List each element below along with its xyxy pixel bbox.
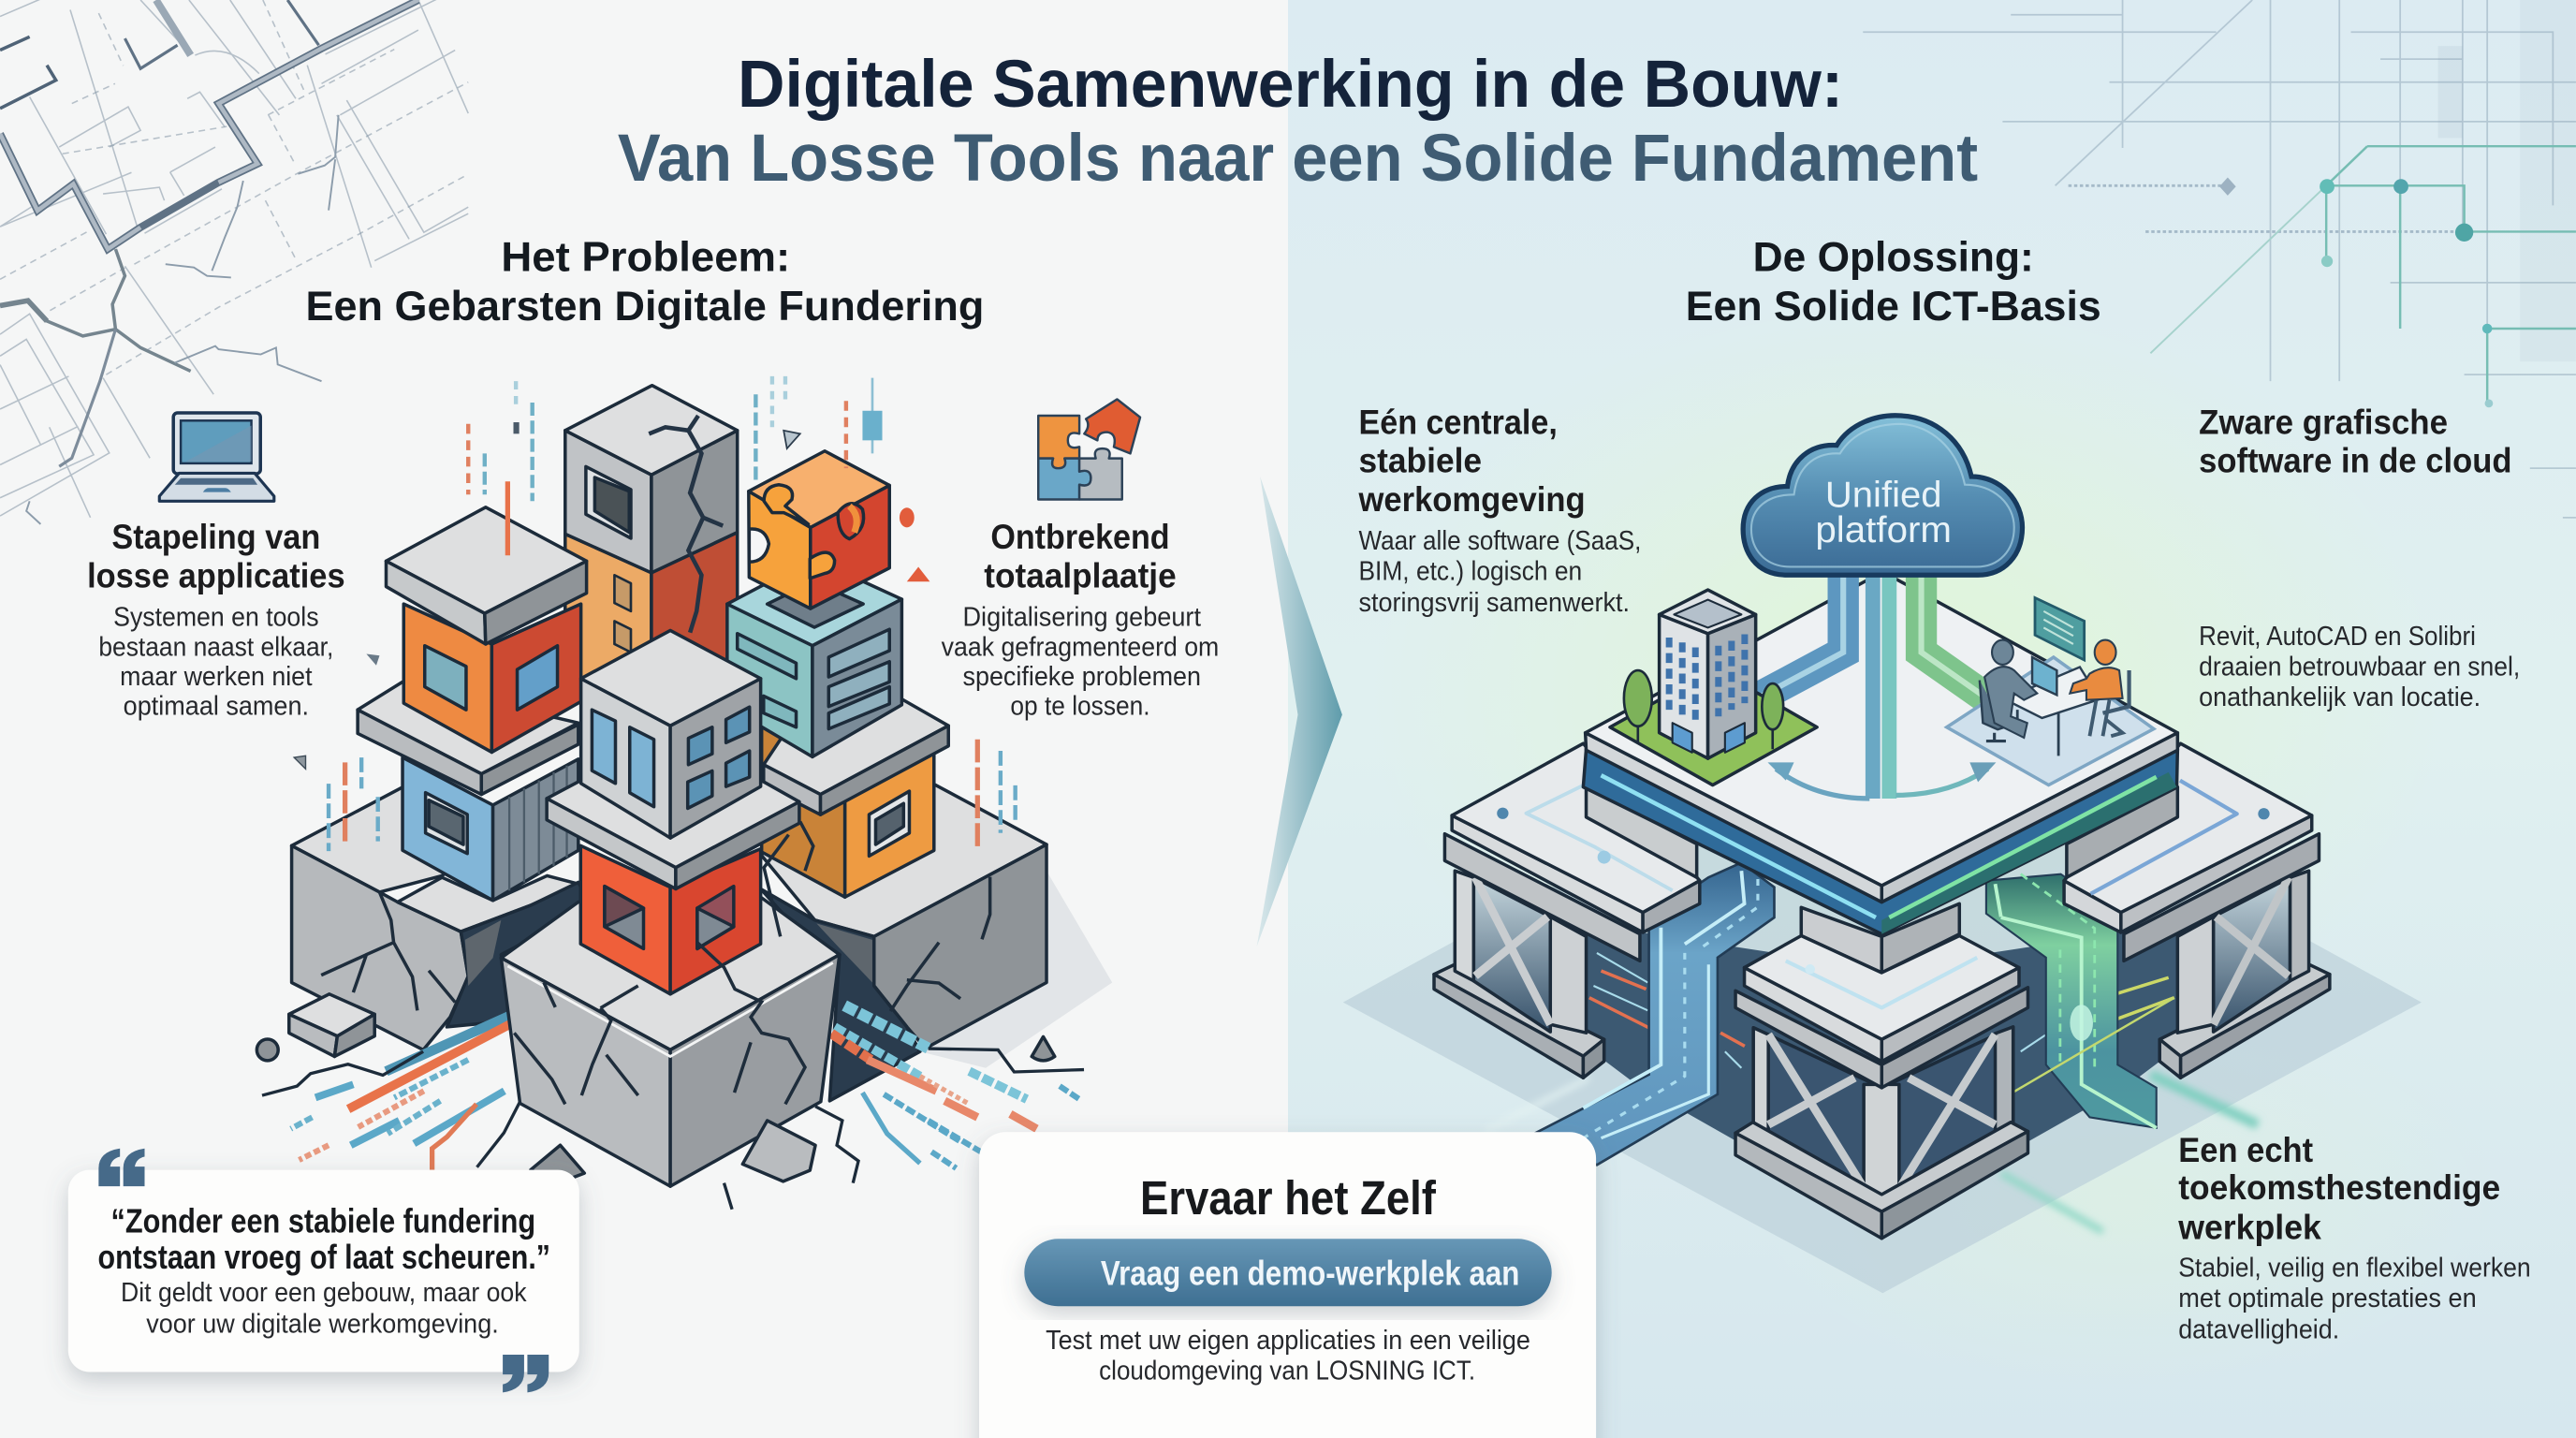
cta text: Test met uw eigen applicaties in een veilige	[1046, 1326, 1530, 1356]
text block: toekomstbestendige werkplek: Stabiel, veilig en flexibel werken	[2178, 1254, 2531, 1284]
text block: zware grafische software	[2199, 403, 2520, 712]
text block: centrale werkomgeving: Eén centrale,	[1358, 403, 1558, 441]
text block: stapeling van losse applicaties: losse applicaties	[87, 556, 345, 594]
blue data channel	[1535, 862, 1774, 1165]
text block: ontbrekend totaalplaatje: Ontbrekend	[990, 518, 1170, 556]
text block: zware grafische software: Zware grafische	[2199, 403, 2448, 441]
text block: centrale werkomgeving: werkomgeving	[1358, 480, 1586, 519]
heading: de oplossing	[1686, 234, 2101, 330]
heading: de oplossing: Een Solide ICT-Basis	[1686, 283, 2101, 330]
debris	[256, 994, 1055, 1183]
chevron arrow between panels	[1257, 477, 1342, 946]
heading: het probleem: Een Gebarsten Digitale Fundering	[305, 283, 984, 330]
title: Van Losse Tools naar een Solide Fundament	[618, 122, 1978, 196]
platform mid band	[1583, 749, 2177, 934]
centre column	[1801, 903, 1959, 973]
front foundation block	[501, 897, 840, 1186]
text block: toekomstbestendige werkplek: werkplek	[2177, 1208, 2321, 1246]
front pillar	[1735, 935, 2027, 1239]
green data channel	[1986, 874, 2174, 1128]
green plate with office building	[1610, 590, 1817, 785]
right pillar	[2064, 743, 2330, 1078]
quote text: voor uw digitale werkomgeving.	[146, 1309, 499, 1339]
text block: ontbrekend totaalplaatje: totaalplaatje	[984, 556, 1177, 594]
icon: laptop	[159, 413, 274, 501]
text block: zware grafische software: onathankelijk van locatie.	[2199, 682, 2481, 712]
text block: stapeling van losse applicaties: bestaan naast elkaar,	[98, 632, 333, 662]
teal tower	[727, 559, 901, 756]
text block: toekomstbestendige werkplek: toekomsthestendige	[2178, 1168, 2500, 1207]
heading: de oplossing: De Oplossing:	[1753, 234, 2034, 281]
title	[618, 48, 1978, 196]
text block: stapeling van losse applicaties: Systemen en tools	[113, 603, 319, 633]
foundation blocks	[292, 784, 1046, 1101]
cloud: unified platform: platform	[1815, 510, 1952, 550]
call to action card	[979, 1132, 1596, 1438]
text block: centrale werkomgeving: storingsvrij samenwerkt.	[1358, 588, 1630, 618]
background: left panel	[0, 0, 1288, 1438]
cta heading: Ervaar het Zelf	[1140, 1171, 1437, 1225]
text block: toekomstbestendige werkplek	[2177, 1131, 2531, 1344]
illustration: cracked foundation with stacked applications	[256, 376, 1112, 1210]
heading: het probleem: Het Probleem:	[501, 234, 790, 281]
text block: ontbrekend totaalplaatje: Digitalisering gebeurt	[963, 603, 1201, 633]
text block: centrale werkomgeving: stabiele	[1358, 442, 1482, 480]
text block: zware grafische software: software in de cloud	[2199, 442, 2511, 480]
puzzle cube	[749, 451, 889, 609]
title: Digitale Samenwerking in de Bouw:	[738, 48, 1843, 122]
blue block, slab and left building	[358, 507, 587, 901]
text block: zware grafische software: Revit, AutoCAD en Solibri	[2199, 622, 2476, 652]
quote text: Dit geldt voor een gebouw, maar ook	[121, 1278, 527, 1308]
cta button: Vraag een demo-werkplek aan	[1101, 1254, 1519, 1292]
blueprint background lines	[0, 0, 468, 524]
icon: opening quote mark	[98, 1149, 145, 1186]
right orange block and slab	[762, 690, 948, 897]
text block: toekomstbestendige werkplek: Een echt	[2178, 1131, 2313, 1169]
back tower	[565, 386, 738, 723]
text block: ontbrekend totaalplaatje	[942, 518, 1219, 721]
data pipes from cloud	[1761, 566, 1984, 799]
circuit background lines	[1863, 0, 2576, 518]
workplace with two people	[1947, 597, 2154, 785]
cloud: unified platform	[1743, 416, 2022, 575]
left pillar	[1434, 743, 1700, 1078]
cta button	[1024, 1239, 1552, 1306]
quote card	[68, 1149, 579, 1392]
data streams from cracks	[291, 1005, 1079, 1170]
text block: stapeling van losse applicaties: Stapeling van	[111, 518, 320, 556]
text block: stapeling van losse applicaties	[87, 518, 345, 721]
falling data fragments	[329, 376, 1016, 851]
text block: ontbrekend totaalplaatje: vaak gefragmenteerd om	[942, 632, 1219, 662]
heading: het probleem	[305, 234, 984, 330]
text block: toekomstbestendige werkplek: datavelligheid.	[2178, 1314, 2339, 1344]
text block: ontbrekend totaalplaatje: op te lossen.	[1010, 691, 1150, 721]
cta text	[1046, 1326, 1530, 1386]
text block: zware grafische software: draaien betrouwbaar en snel,	[2199, 652, 2520, 682]
icon: closing quote mark	[503, 1355, 549, 1392]
cloud: unified platform: Unified	[1825, 475, 1942, 515]
text block: centrale werkomgeving	[1358, 403, 1641, 618]
illustration: solid platform with unified cloud	[1343, 416, 2422, 1293]
quote text: ontstaan vroeg of laat scheuren.”	[97, 1238, 550, 1276]
text block: ontbrekend totaalplaatje: specifieke problemen	[963, 662, 1201, 692]
icon: puzzle	[1038, 399, 1140, 500]
glowing beams	[1485, 1075, 2258, 1232]
text block: toekomstbestendige werkplek: met optimale prestaties en	[2178, 1284, 2477, 1313]
text block: centrale werkomgeving: Waar alle software (SaaS,	[1358, 526, 1641, 556]
text block: centrale werkomgeving: BIM, etc.) logisch en	[1358, 557, 1582, 587]
cracks	[321, 822, 990, 1104]
top platform	[1586, 572, 2177, 902]
quote text	[97, 1201, 550, 1339]
text block: stapeling van losse applicaties: optimaal samen.	[124, 691, 309, 721]
cta text: cloudomgeving van LOSNING ICT.	[1099, 1356, 1475, 1386]
centre red block and gray building	[547, 630, 799, 994]
text block: stapeling van losse applicaties: maar werken niet	[120, 662, 313, 692]
background: right panel	[1288, 0, 2576, 1438]
quote text: “Zonder een stabiele fundering	[111, 1201, 535, 1240]
arrows on platform	[1767, 762, 1996, 799]
dark server core	[1560, 920, 2204, 1224]
